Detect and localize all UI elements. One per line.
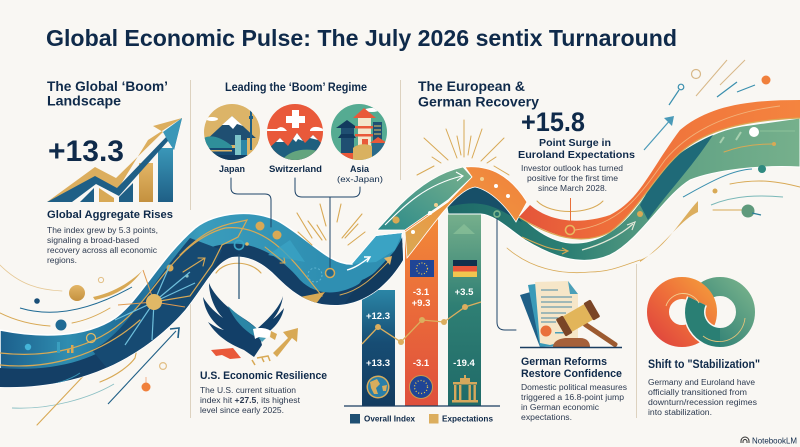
connector (494, 211, 516, 330)
connectors (231, 178, 360, 278)
text: euroland: Investor outlook has turned (521, 164, 623, 173)
baseline (344, 405, 500, 407)
bar labels: -19.4 (453, 358, 476, 369)
watermark: NotebookLM: NotebookLM (752, 436, 797, 446)
labels: regions: Switzerland (269, 164, 322, 175)
labels: regions: (ex-Japan) (337, 174, 383, 184)
heading: US: U.S. Economic Resilience (200, 370, 327, 382)
text: global aggregate: regions. (47, 256, 77, 265)
labels: regions (219, 164, 383, 184)
right-side streaks and arrows (507, 60, 800, 273)
bar labels: -3.1 (413, 358, 430, 369)
icon: Japan (204, 104, 260, 161)
text: global aggregate: recovery across all economic (47, 246, 157, 255)
text: German reforms (521, 383, 627, 422)
text: German reforms: Domestic political measures (521, 383, 627, 392)
text: shift: Germany and Euroland have (648, 378, 756, 387)
legend: Expectations (442, 414, 493, 424)
panel: US resilience (200, 254, 327, 415)
flag: EU (410, 260, 434, 277)
bar labels: +3.5 (455, 287, 474, 298)
legend: Overall Index (364, 414, 415, 424)
icon: rising arrow and bars (47, 118, 182, 202)
bar chart (344, 205, 500, 406)
bar labels: +13.3 (366, 358, 390, 369)
panel: German reforms (494, 211, 627, 422)
text: US: The U.S. current situation (200, 386, 296, 395)
bar labels: +12.3 (366, 311, 390, 322)
icon: documents and gavel (520, 281, 622, 348)
text: euroland: positive for the first time (527, 174, 619, 183)
heading: euroland (518, 137, 635, 161)
text: global aggregate: signaling a broad-based (47, 236, 139, 245)
panel: global boom landscape (47, 79, 182, 265)
icon: Switzerland (267, 104, 323, 160)
heading: european: The European & (418, 79, 525, 94)
decorative lines: lower-left streaks (0, 265, 179, 425)
heading: German reforms (521, 356, 622, 380)
icon: interlocking loop (658, 286, 746, 342)
panel: leading the boom regime (204, 82, 387, 278)
stat: +15.8: +15.8 (521, 107, 585, 137)
title: Global Economic Pulse: The July 2026 sentix Turnaround (46, 25, 677, 51)
panel dividers (190, 80, 636, 418)
heading: leading regime: Leading the ‘Boom’ Regime (225, 82, 367, 94)
bar labels: +9.3 (412, 298, 430, 309)
text: shift: downturn/recession regimes (648, 398, 757, 407)
expectations line (362, 302, 481, 345)
text: shift (648, 378, 757, 417)
heading: european: German Recovery (418, 94, 540, 110)
arc and stem (216, 254, 261, 299)
heading: shift: Shift to "Stabilization" (648, 359, 760, 371)
icon: gold arrow (273, 328, 298, 357)
ribbon: green and orange wave (377, 100, 800, 260)
bar labels: -3.1 (413, 287, 430, 298)
heading: global landscape: The Global ‘Boom’ (47, 79, 168, 94)
bar labels (366, 287, 476, 369)
icon: globe (366, 376, 390, 398)
heading: euroland: Euroland Expectations (518, 149, 635, 161)
text: US: level since early 2025. (200, 406, 284, 415)
text: German reforms: expectations. (521, 413, 572, 422)
text: US: index hit +27.5, its highest (200, 396, 301, 405)
text: German reforms: triggered a 16.8-point jump (521, 393, 625, 402)
flag: Germany (453, 260, 477, 277)
icon: EU coin (410, 376, 432, 398)
ribbon: blue wave (0, 213, 410, 400)
heading: european (418, 79, 540, 110)
rays above valley (297, 204, 365, 245)
icon: Brandenburg Gate (452, 375, 478, 402)
text: shift: into stabilization. (648, 408, 712, 417)
icon: eagle (203, 283, 284, 365)
heading: global landscape: Landscape (47, 94, 122, 108)
sunburst (115, 265, 195, 345)
labels: regions: Asia (350, 164, 370, 175)
text: global aggregate (47, 226, 158, 265)
panel: European and German recovery (417, 79, 635, 234)
marker: euroland (537, 198, 603, 234)
text: global aggregate: The index grew by 5.3 points, (47, 226, 158, 235)
heading: German reforms: German Reforms (521, 356, 607, 368)
icon: Asia (331, 104, 387, 160)
text: euroland (521, 164, 623, 193)
labels: regions: Japan (219, 164, 245, 175)
heading: German reforms: Restore Confidence (521, 368, 622, 380)
text: German reforms: in German economic (521, 403, 599, 412)
rays above peak (417, 120, 509, 175)
legend (350, 414, 493, 424)
heading: global landscape (47, 79, 168, 108)
text: US (200, 386, 301, 415)
heading: global aggregate rises: Global Aggregate Rises (47, 209, 173, 221)
panel: shift to stabilization (648, 286, 760, 417)
stat: +13.3: +13.3 (48, 135, 124, 168)
heading: euroland: Point Surge in (539, 137, 611, 149)
text: shift: officially transitioned from (648, 388, 747, 397)
text: euroland: since March 2028. (538, 184, 607, 193)
